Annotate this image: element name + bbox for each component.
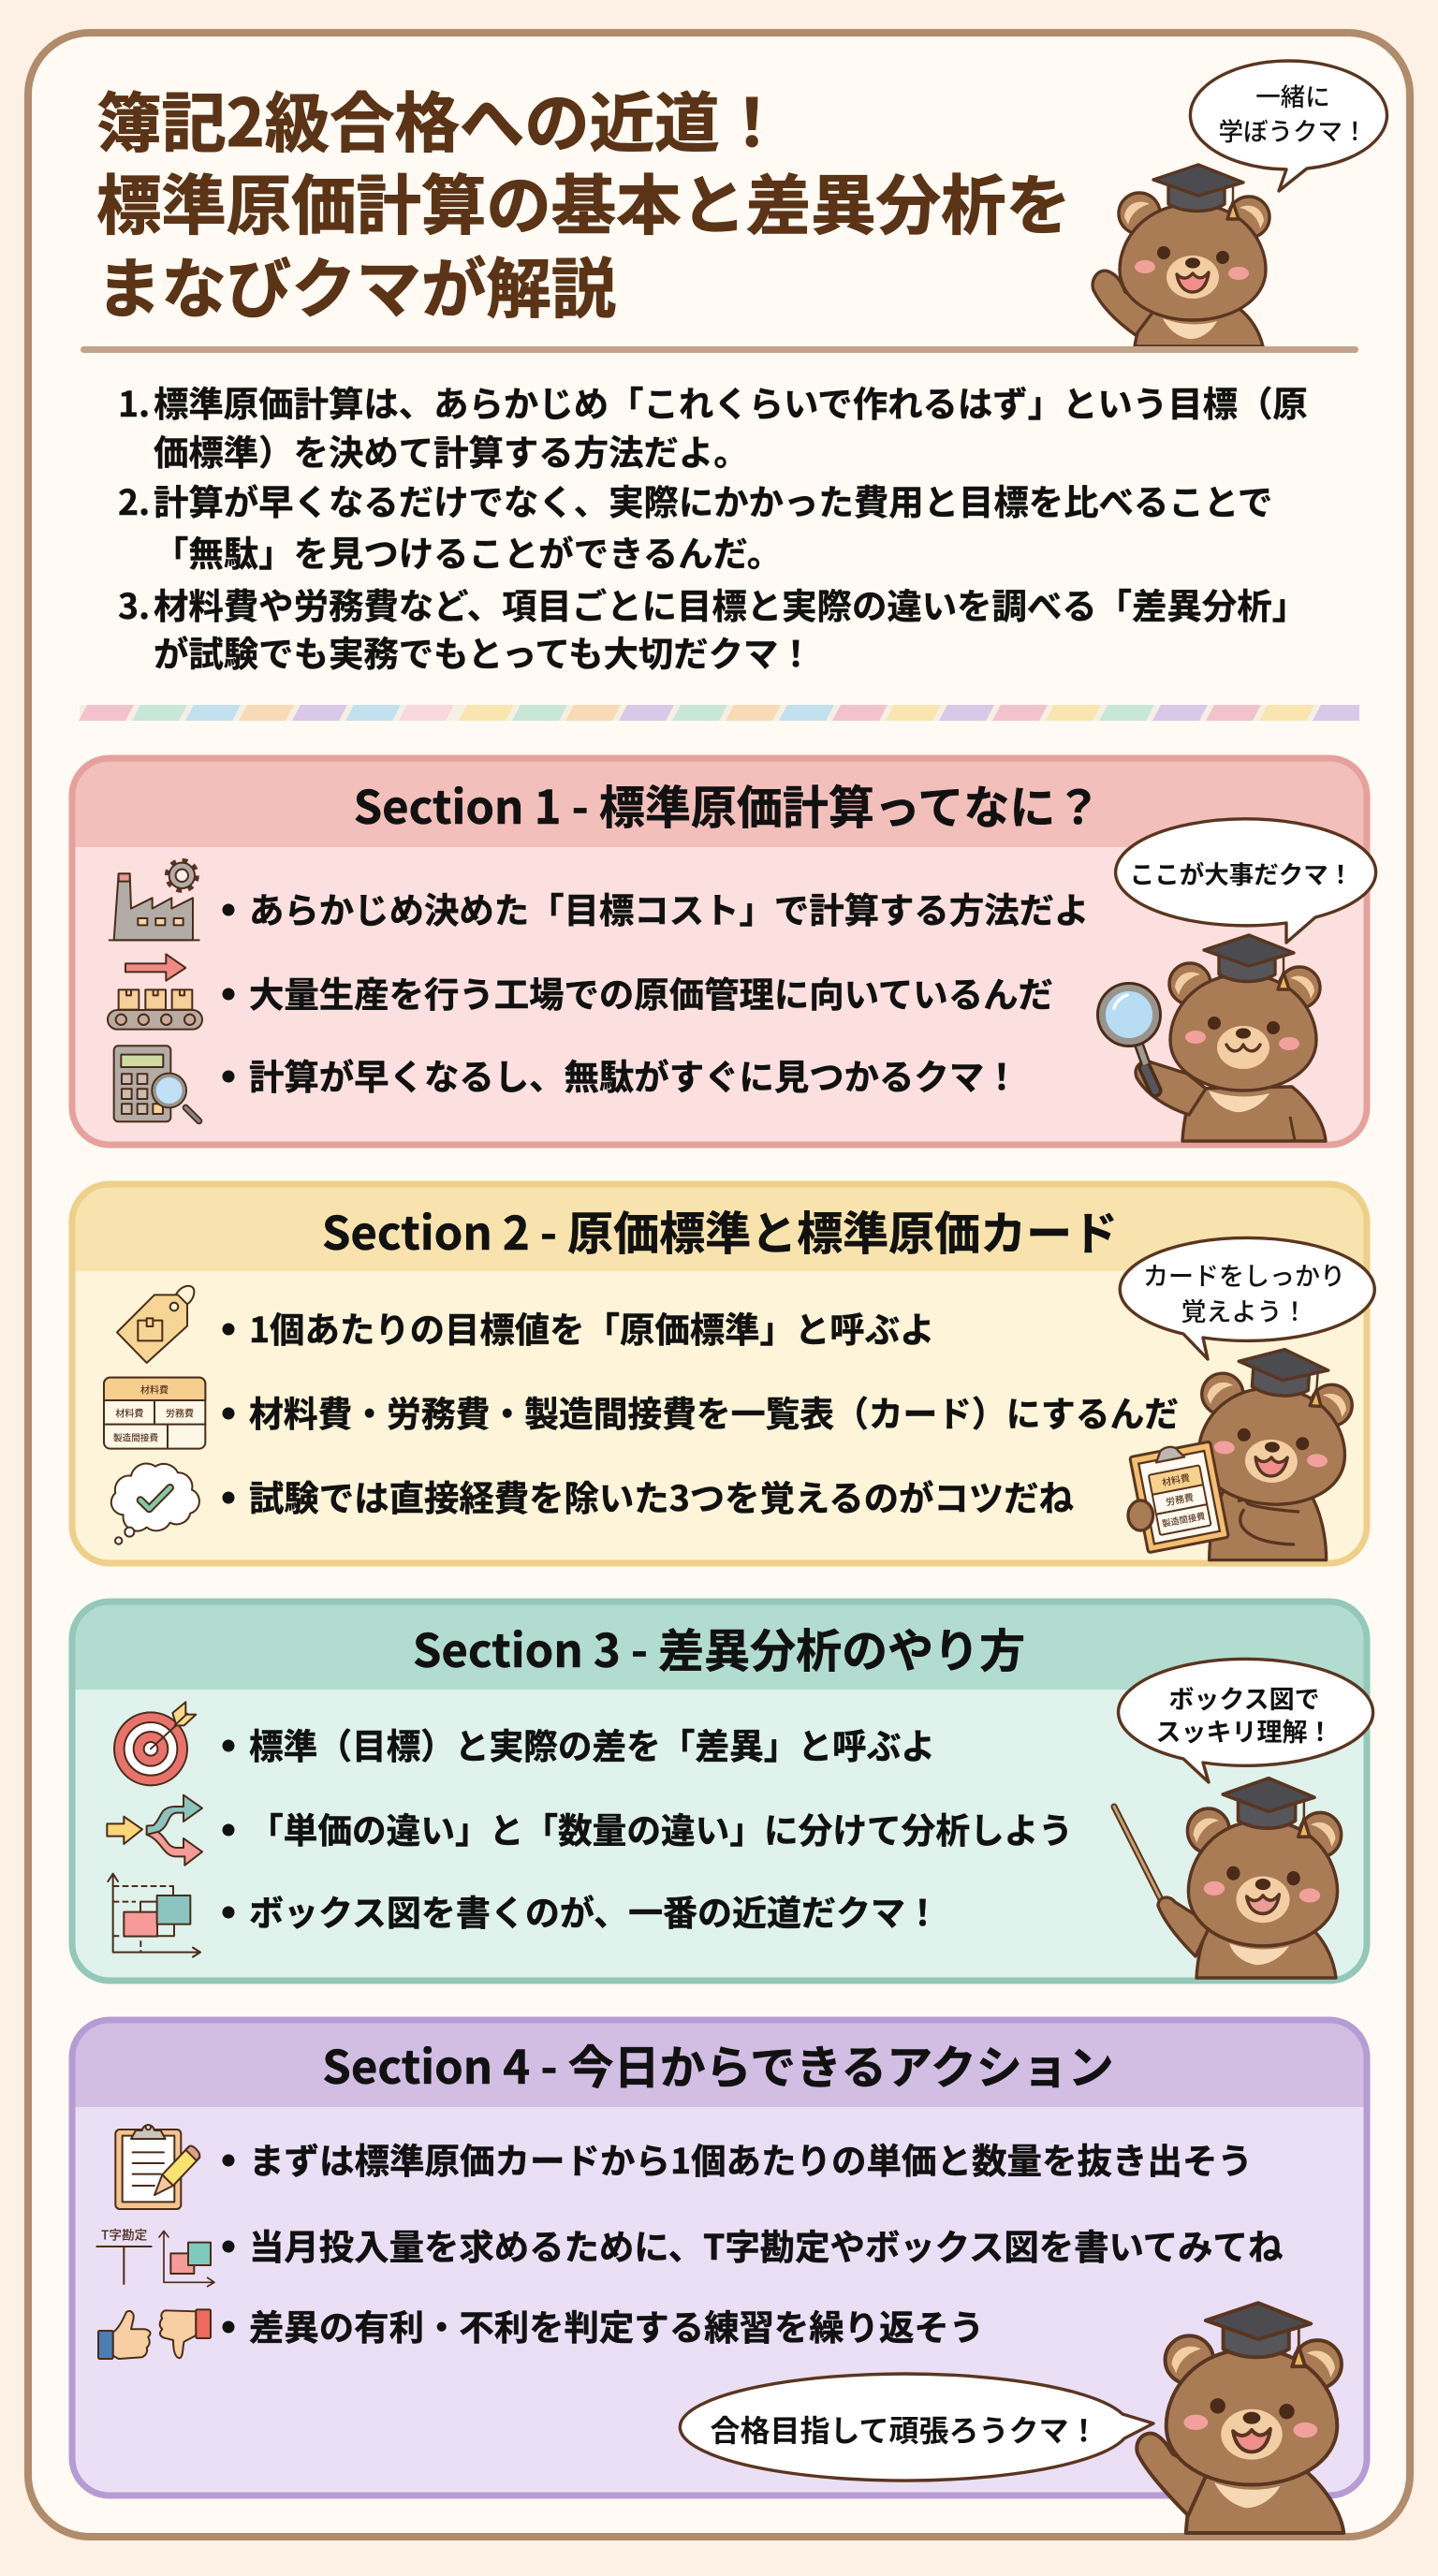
section 3 bullets: 標準（目標）と実際の差を「差異」と呼ぶよ — [249, 1719, 935, 1769]
section 1 bullets — [223, 883, 1089, 1100]
speech bubble: section 3: スッキリ理解！ — [1155, 1712, 1333, 1749]
title: 簿記2級合格への近道！ — [96, 70, 785, 165]
title: まなびクマが解説 — [96, 236, 616, 330]
section 4 bullets — [223, 2133, 1283, 2350]
intro list — [118, 376, 1308, 677]
speech bubble: header — [1190, 61, 1387, 191]
bear: holding clipboard: 労務費 — [1165, 1489, 1195, 1508]
bear: header waving — [1093, 165, 1269, 346]
icon: thumbs up and down — [98, 2309, 211, 2359]
icon: factory — [110, 861, 199, 940]
title: 標準原価計算の基本と差異分析を — [96, 153, 1071, 247]
bear: magnifying glass — [1098, 935, 1326, 1141]
panel: section 1 — [72, 758, 1376, 1145]
speech bubble: section 4: 合格目指して頑張ろうクマ！ — [710, 2408, 1099, 2451]
section 4 bullets: 当月投入量を求めるために、T字勘定やボックス図を書いてみてね — [249, 2219, 1283, 2270]
icon: thought check — [111, 1464, 199, 1544]
intro list: 価標準）を決めて計算する方法だよ。 — [154, 425, 749, 476]
section 1 bullets: 大量生産を行う工場での原価管理に向いているんだ — [249, 967, 1053, 1017]
intro list: 2. — [118, 475, 150, 525]
section 2 bullets: 試験では直接経費を除いた3つを覚えるのがコツだね — [249, 1471, 1074, 1521]
intro list: 計算が早くなるだけでなく、実際にかかった費用と目標を比べることで — [154, 475, 1272, 525]
icon: conveyor — [108, 954, 202, 1030]
icon: cost card: 材料費 — [115, 1406, 143, 1420]
intro list: 3. — [118, 578, 150, 629]
intro list: 「無駄」を見つけることができるんだ。 — [154, 526, 782, 577]
speech bubble: header: 学ぼうクマ！ — [1219, 111, 1367, 148]
section 2 bullets: 1個あたりの目標値を「原価標準」と呼ぶよ — [249, 1302, 934, 1353]
section 3 bullets — [223, 1719, 1073, 1936]
intro list: 材料費や労務費など、項目ごとに目標と実際の違いを調べる「差異分析」 — [154, 578, 1307, 629]
speech bubble: section 4 — [680, 2374, 1153, 2481]
section 4 bullets: 差異の有利・不利を判定する練習を繰り返そう — [249, 2300, 984, 2350]
bear: holding clipboard: 材料費 — [1161, 1470, 1191, 1488]
bear: holding clipboard — [1128, 1344, 1356, 1560]
icon: box diagram — [108, 1874, 200, 1957]
speech bubble: section 2: カードをしっかり — [1143, 1256, 1345, 1293]
icon: price tag — [117, 1286, 194, 1363]
intro list: 1. — [118, 376, 150, 427]
panel: section 3 — [72, 1602, 1373, 1981]
section 2 heading: Section 2 - 原価標準と標準原価カード — [322, 1197, 1118, 1264]
bear: waving cheer — [1137, 2303, 1343, 2533]
section 3 bullets: ボックス図を書くのが、一番の近道だクマ！ — [249, 1885, 940, 1936]
bear: pointer stick — [1114, 1778, 1342, 1978]
section 3 bullets: 「単価の違い」と「数量の違い」に分けて分析しよう — [249, 1803, 1073, 1853]
speech bubble: section 1 — [1116, 819, 1376, 943]
icon: calculator with magnifier — [114, 1046, 199, 1121]
title — [96, 70, 1071, 330]
icon: T account and box diagram: T字勘定 — [101, 2224, 148, 2243]
icon: clipboard and pencil — [115, 2125, 199, 2209]
section 2 bullets: 材料費・労務費・製造間接費を一覧表（カード）にするんだ — [249, 1386, 1179, 1437]
icon: T account and box diagram — [96, 2224, 214, 2287]
icon: target — [114, 1702, 196, 1785]
intro list: 標準原価計算は、あらかじめ「これくらいで作れるはず」という目標（原 — [154, 376, 1308, 427]
speech bubble: header: 一緒に — [1255, 77, 1330, 113]
intro list: が試験でも実務でもとっても大切だクマ！ — [154, 626, 814, 677]
icon: cost card — [104, 1378, 205, 1449]
section 1 bullets: あらかじめ決めた「目標コスト」で計算する方法だよ — [249, 883, 1089, 933]
section 4 bullets: まずは標準原価カードから1個あたりの単価と数量を抜き出そう — [249, 2133, 1253, 2184]
section 4 heading: Section 4 - 今日からできるアクション — [322, 2031, 1114, 2098]
speech bubble: section 3 — [1119, 1659, 1373, 1782]
section 3 heading: Section 3 - 差異分析のやり方 — [413, 1615, 1025, 1681]
panel: section 4 — [72, 2020, 1367, 2533]
section 1 bullets: 計算が早くなるし、無駄がすぐに見つかるクマ！ — [249, 1049, 1020, 1100]
panel: section 2 — [72, 1184, 1374, 1563]
speech bubble: section 1: ここが大事だクマ！ — [1130, 855, 1353, 891]
bear: holding clipboard: 製造間接費 — [1161, 1509, 1206, 1530]
rainbow strip — [79, 705, 1359, 721]
icon: cost card: 製造間接費 — [113, 1430, 158, 1443]
speech bubble: section 2: 覚えよう！ — [1181, 1292, 1307, 1328]
icon: cost card: 労務費 — [166, 1406, 194, 1420]
icon: split arrows — [107, 1795, 202, 1866]
icon: cost card: 材料費 — [140, 1382, 169, 1396]
section 1 heading: Section 1 - 標準原価計算ってなに？ — [354, 771, 1101, 838]
speech bubble: section 2 — [1120, 1237, 1374, 1359]
section 2 bullets — [223, 1302, 1179, 1521]
divider — [81, 346, 1358, 353]
speech bubble: section 3: ボックス図で — [1168, 1679, 1320, 1716]
